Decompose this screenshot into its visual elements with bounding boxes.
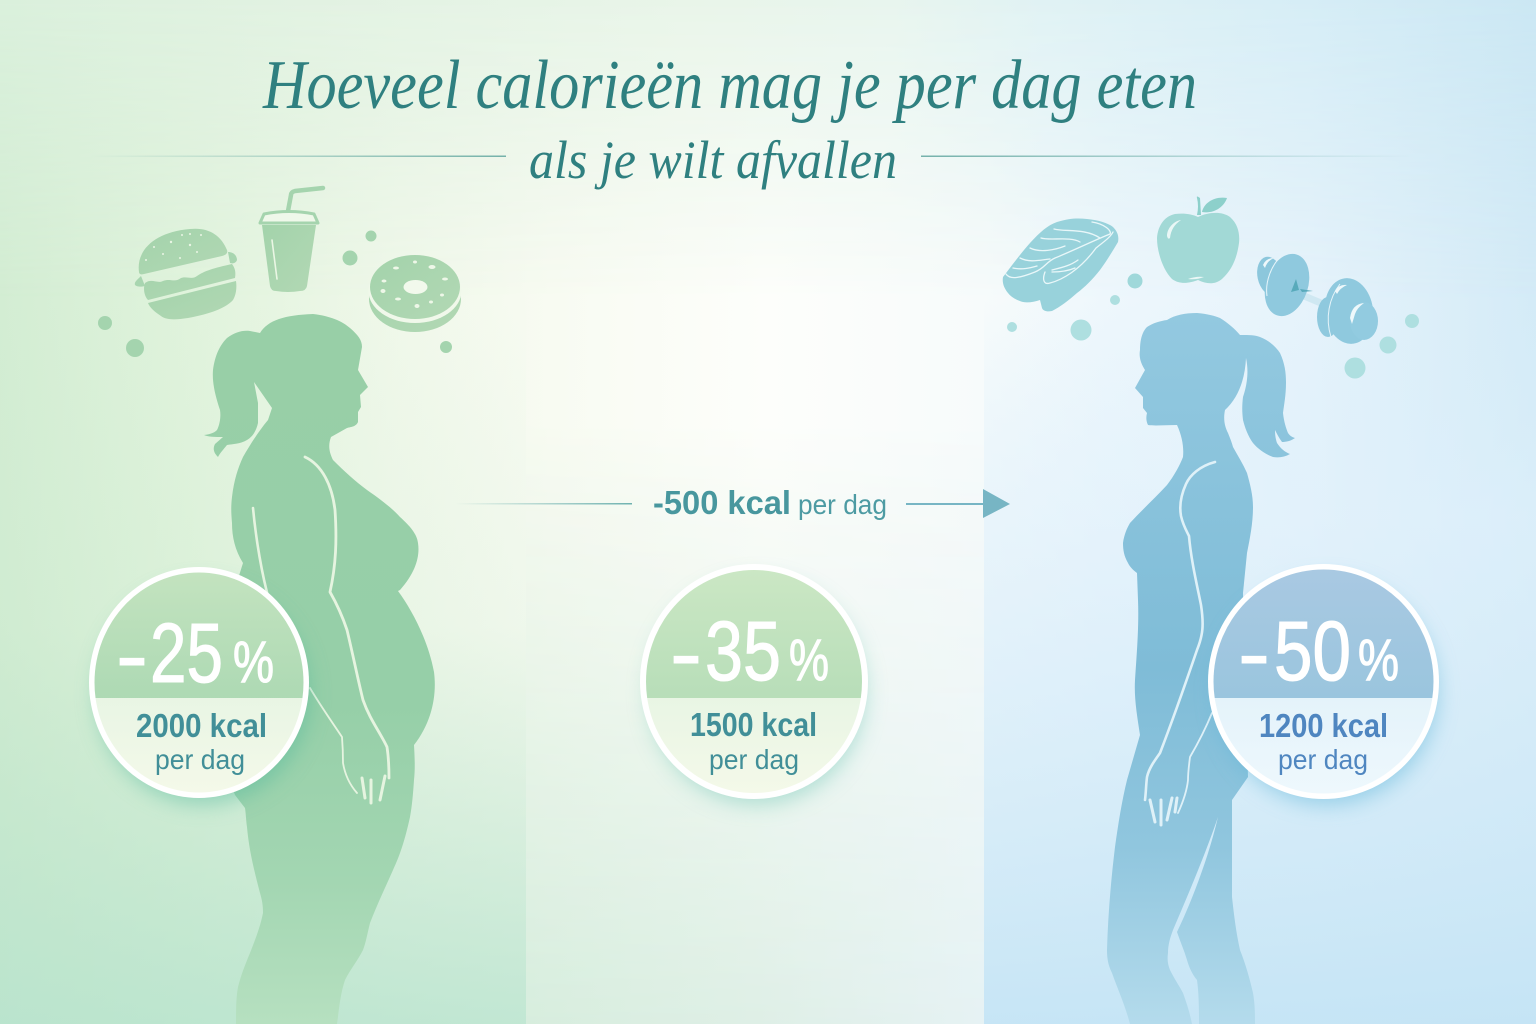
arm outline xyxy=(253,457,389,803)
left figure: heavier woman silhouette xyxy=(200,314,435,1024)
percentage: - xyxy=(116,608,148,702)
icon: soft drink cup xyxy=(260,188,323,292)
percentage: 35 xyxy=(705,604,781,698)
title: Hoeveel calorieën mag je per dag eten xyxy=(262,47,1197,124)
percentage: % xyxy=(1358,628,1399,693)
percentage: - xyxy=(670,606,702,700)
icon: donut xyxy=(368,255,462,332)
right figure: slim woman silhouette xyxy=(1107,313,1295,1024)
calories: 1500 kcal xyxy=(690,706,817,743)
icon: burger xyxy=(135,229,237,319)
icon: salmon steak xyxy=(1003,218,1118,311)
calories xyxy=(136,707,267,775)
calories: 1200 kcal xyxy=(1259,707,1388,744)
arrow: -500 kcal per day xyxy=(455,484,1010,521)
arm outline xyxy=(1145,462,1215,825)
arrow: -500 kcal per day: per dag xyxy=(798,489,887,520)
percentage: % xyxy=(789,628,829,693)
title xyxy=(262,47,1197,190)
calories xyxy=(690,706,817,775)
percentage xyxy=(670,604,829,700)
percentage xyxy=(1238,604,1399,700)
calories: 2000 kcal xyxy=(136,707,267,744)
percentage: % xyxy=(233,630,274,695)
arrow label: -500 kcal xyxy=(653,484,791,521)
subtitle: als je wilt afvallen xyxy=(529,130,897,190)
calories: per dag xyxy=(155,744,245,775)
calories: per dag xyxy=(709,744,799,775)
decorative dots xyxy=(1007,274,1419,378)
icon: apple xyxy=(1157,196,1239,283)
badge: -50% xyxy=(1208,564,1439,804)
badge: -25% xyxy=(89,567,309,804)
right icons: healthy food and exercise xyxy=(1003,196,1419,378)
left icons: unhealthy food xyxy=(98,188,462,357)
percentage: 25 xyxy=(150,606,223,700)
decorative dots xyxy=(98,230,452,357)
badge: -35% xyxy=(640,564,868,804)
percentage: - xyxy=(1238,606,1270,700)
calories: per dag xyxy=(1278,744,1368,775)
percentage xyxy=(116,606,274,702)
percentage: 50 xyxy=(1274,604,1351,698)
icon: dumbbell xyxy=(1254,248,1378,347)
calories xyxy=(1259,707,1388,775)
